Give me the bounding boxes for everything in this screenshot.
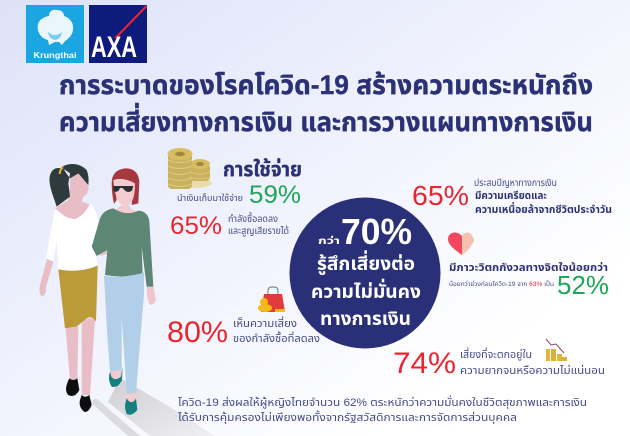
title: [59, 70, 593, 137]
circle callout: over 70%: [290, 198, 440, 348]
stat: 65% stress: ประสบปัญหาทางการเงิน: [474, 178, 557, 189]
circle callout: over 70%: ความไม่มั่นคง: [311, 279, 421, 303]
footer note: [177, 395, 587, 424]
stat: 52% mental health: น้อยกว่าช่วงก่อนโควิด-19 จาก 63% เป็น: [449, 279, 554, 288]
footer note: โควิด-19 ส่งผลให้ผู้หญิงไทยจำนวน 62% ตระหนักว่าความมั่นคงในชีวิตสุขภาพและการเงิน: [178, 395, 587, 409]
stat: 52% mental health: 52%: [557, 270, 609, 300]
stat: 52% mental health: มีภาวะวิตกกังวลทางจิตใจน้อยกว่า: [449, 261, 608, 274]
stat: 65% stress: มีความเครียดและ: [475, 190, 547, 202]
circle callout: over 70%: ทางการเงิน: [320, 309, 411, 330]
icon: heart and brain: [448, 232, 474, 255]
logo: Krungthai: Krungthai: [34, 51, 76, 60]
stat: 65% income: และสูญเสียรายได้: [228, 225, 289, 237]
woman right: [92, 168, 156, 415]
icon: shopping bag: [258, 287, 285, 312]
stat: 74%: เสี่ยงที่จะตกอยู่ใน: [460, 347, 532, 361]
footer note: ได้รับการคุ้มครองไม่เพียงพอทั้งจากรัฐสวัสดิการและการจัดการส่วนบุคคล: [177, 410, 517, 424]
stat: 80%: [167, 316, 320, 349]
stat: 80%: 80%: [167, 316, 228, 349]
title: ความเสี่ยงทางการเงิน และการวางแผนทางการเงิน: [59, 103, 593, 137]
stat: 80%: เห็นความเสี่ยง: [233, 316, 297, 330]
stat: 65% income: 65%: [170, 212, 222, 240]
logo: AXA: [89, 5, 147, 64]
logo: AXA: AXA: [91, 31, 137, 64]
woman left: [39, 164, 99, 412]
stat: 65% income: [170, 211, 289, 240]
walking shadows: [90, 378, 215, 436]
stat: 65% stress: 65%: [412, 180, 469, 211]
stat: 74%: [393, 347, 605, 380]
stat: 52% mental health: [449, 261, 609, 300]
stat: 59%: นำเงินเก็บมาใช้จ่าย: [177, 193, 243, 203]
stat: 65% stress: [412, 178, 612, 216]
title: การระบาดของโรคโควิด-19 สร้างความตระหนักถึง: [59, 70, 593, 100]
stat: 65% stress: ความเหนื่อยล้าจากชีวิตประจำวัน: [475, 202, 612, 216]
stat: 74%: 74%: [393, 347, 456, 380]
stat: 65% income: กำลังซื้อลดลง: [228, 211, 278, 225]
heading: spending: การใช้จ่าย: [223, 159, 302, 181]
circle callout: over 70%: กว่า: [318, 234, 340, 247]
icon: falling coins chart: [546, 339, 567, 361]
illustration: two women walking: [39, 164, 156, 415]
circle callout: over 70%: 70%: [341, 211, 412, 252]
stat: 59%: [177, 181, 301, 209]
logo: Krungthai: [26, 5, 84, 63]
icon: coins: [168, 148, 212, 189]
circle callout: over 70%: รู้สึกเสี่ยงต่อ: [317, 250, 415, 275]
stat: 80%: ของกำลังซื้อที่ลดลง: [233, 331, 320, 345]
stat: 74%: ความยากจนหรือความไม่แน่นอน: [460, 364, 605, 377]
section: spending: [170, 159, 302, 240]
stat: 59%: 59%: [249, 181, 301, 209]
